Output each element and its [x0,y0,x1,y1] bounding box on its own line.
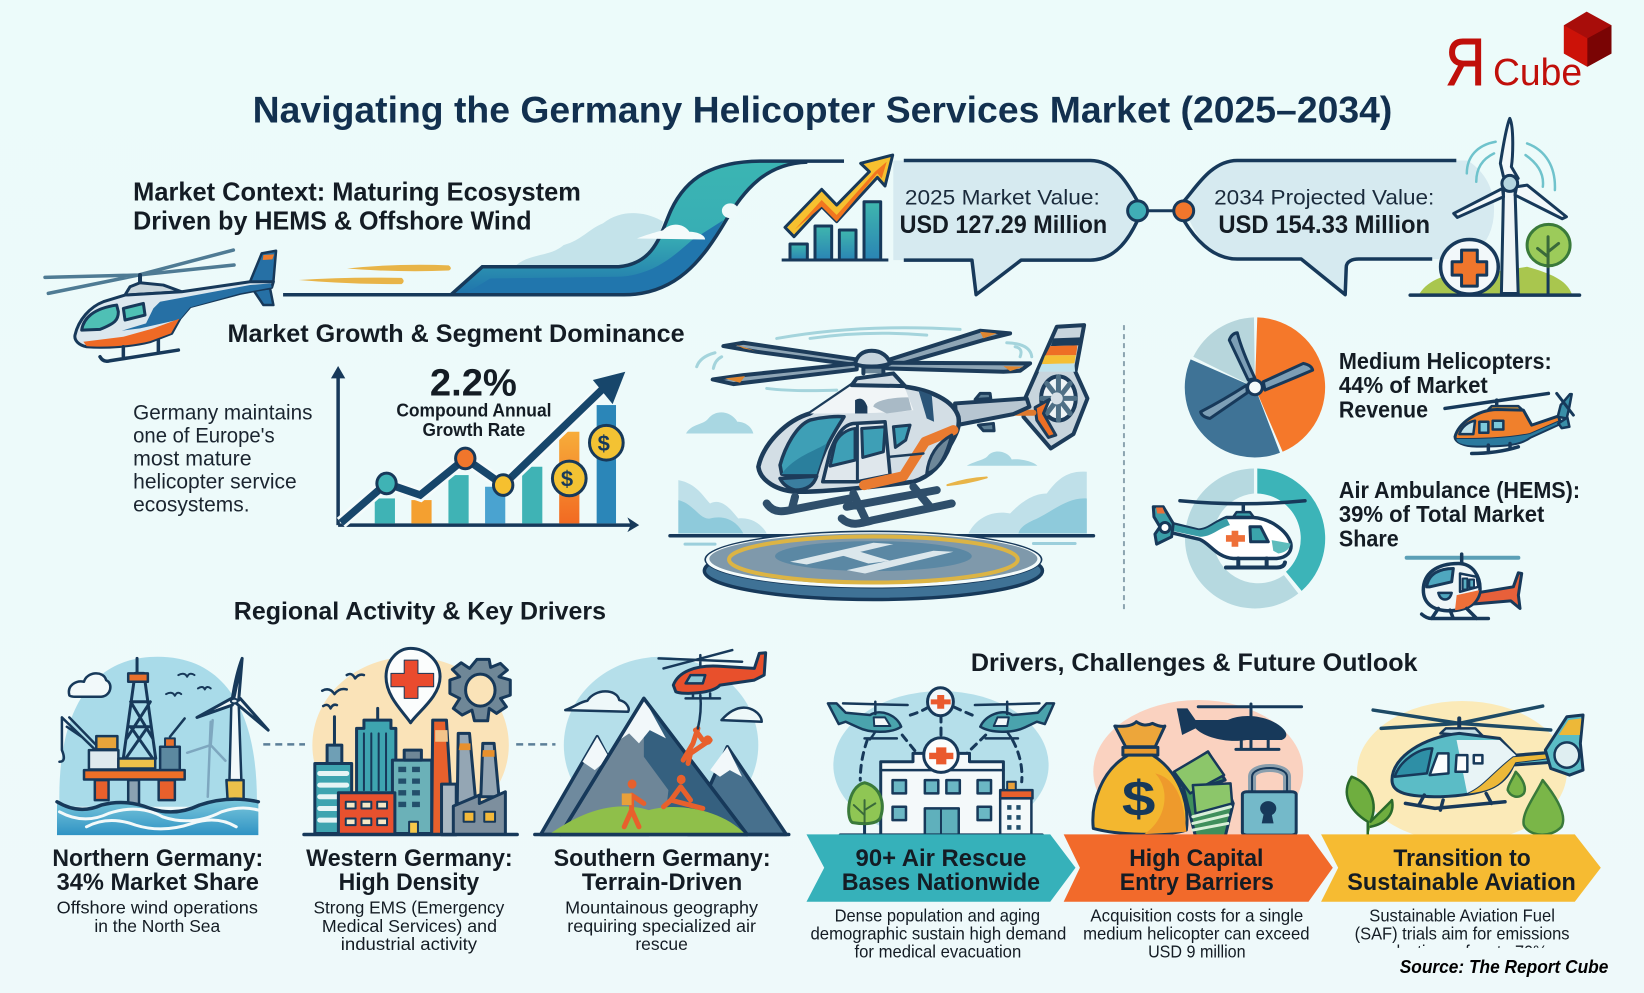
panel: southern germany: Terrain-Driven [582,869,742,896]
panel: sustainable aviation: Sustainable Aviation [1347,869,1576,896]
panel: sustainable aviation [1321,701,1601,961]
text: medium helicopters: Medium Helicopters: [1339,348,1552,374]
panel: capital barriers: USD 9 million [1148,941,1246,961]
callout: 2034 projected value: 2034 Projected Value: [1214,186,1434,210]
callout: 2034 projected value: USD 154.33 Million [1218,211,1430,239]
panel: capital barriers: Acquisition costs for a single [1090,906,1303,926]
heading: regional: Regional Activity & Key Drivers [234,598,606,626]
text: medium helicopters: 44% of Market [1339,372,1488,398]
title: Navigating the Germany Helicopter Services Market (2025–2034) [253,90,1392,131]
chart: CAGR growth: 2.2% [430,361,517,403]
panel: western germany: Medical Services) and [322,916,497,936]
panel: sustainable aviation: reductions of up to 70% [1377,941,1548,961]
text: medium helicopters [1339,348,1552,422]
callout: 2034 projected value [1184,160,1494,295]
panel: sustainable aviation: Transition to [1393,845,1531,872]
text: air ambulance: 39% of Total Market [1339,501,1545,527]
panel: northern germany: in the North Sea [94,916,220,936]
panel: northern germany: Northern Germany: [52,845,263,872]
panel: western germany: Strong EMS (Emergency [313,897,504,917]
panel: western germany: industrial activity [341,934,477,954]
panel: air rescue bases: demographic sustain high demand [810,923,1066,943]
icon: wind turbine and medical badge [1410,118,1580,295]
panel: southern germany: Southern Germany: [554,845,771,872]
text: air ambulance: Share [1339,525,1399,551]
icon: ambulance helicopter [1153,501,1305,567]
icon: speed lines [299,265,451,284]
text block: germany [133,401,312,517]
connector: value dots [1128,201,1194,221]
panel: capital barriers [1064,700,1333,961]
panel: capital barriers: medium helicopter can exceed [1083,923,1310,943]
chart: CAGR growth: $ [561,467,573,492]
pie chart: medium helicopters [1185,317,1325,457]
donut chart: air ambulance [1185,468,1325,608]
chart: CAGR growth: $ [598,431,610,456]
chevron: teal [806,834,1076,902]
panel: southern germany [535,650,789,954]
panel: air rescue bases: Dense population and aging [835,906,1040,926]
panel: sustainable aviation: Sustainable Aviation Fuel [1369,906,1555,926]
panel: southern germany: requiring specialized air [567,916,756,936]
panel: air rescue bases [806,688,1076,961]
callout: 2025 market value: USD 127.29 Million [900,211,1107,239]
text block: germany: ecosystems. [133,494,250,517]
icon: hospital network [828,688,1054,839]
panel: northern germany: Offshore wind operations [57,897,258,917]
icon: front-view helicopter [1407,554,1522,618]
connector [516,743,555,746]
chevron: yellow [1321,834,1601,902]
panel: southern germany: Mountainous geography [565,897,758,917]
source: Source: The Report Cube [1400,956,1608,977]
logo: RCube: Cube [1493,51,1582,93]
chart: CAGR growth [331,361,639,532]
ribbon: growth path [283,161,844,295]
text: air ambulance [1339,477,1580,551]
panel: southern germany: rescue [635,934,688,954]
text: medium helicopters: Revenue [1339,396,1428,422]
icon: orange helicopter [1445,393,1573,453]
panel: northern germany [52,657,268,936]
logo: RCube [1445,12,1611,100]
panel: northern germany: 34% Market Share [57,869,259,896]
text block: germany: most mature [133,448,252,471]
chart: CAGR growth: Compound Annual [396,399,551,420]
text block: germany: one of Europe's [133,425,275,448]
heading: market context [133,176,581,236]
panel: capital barriers: High Capital [1129,845,1263,872]
panel: air rescue bases: Bases Nationwide [842,869,1040,896]
heading: market context: Driven by HEMS & Offshore Wind [133,206,532,236]
panel: western germany [304,648,517,954]
text block: germany: helicopter service [133,471,297,494]
callout: 2025 market value: 2025 Market Value: [905,186,1100,210]
panel: capital barriers: Entry Barriers [1120,869,1274,896]
illustration: central helicopter over helipad [670,325,1093,599]
icon: rising bar chart with arrow [782,155,893,260]
connector [263,743,305,746]
text block: germany: Germany maintains [133,401,312,424]
panel: air rescue bases: 90+ Air Rescue [856,845,1026,872]
icon: mountain rescue [535,650,789,834]
icon: city and industry [304,648,517,835]
logo: RCube: Я [1445,25,1485,100]
panel: western germany: Western Germany: [306,845,513,872]
icon: SAF helicopter, leaf and drops [1347,701,1583,842]
icon: left helicopter [45,250,276,361]
panel: western germany: High Density [339,869,480,896]
callout: 2025 market value [893,160,1138,295]
panel: air rescue bases: for medical evacuation [855,941,1021,961]
heading: market growth: Market Growth & Segment Dominance [228,320,685,348]
icon: offshore rig and turbines [57,657,268,835]
divider [1123,325,1125,610]
heading: drivers: Drivers, Challenges & Future Outlook [971,649,1419,677]
icon: dollar sign: $ [1122,770,1155,827]
icon: money bag, cash and padlock [1093,700,1303,843]
heading: market context: Market Context: Maturing Ecosystem [133,176,581,206]
chevron: orange [1064,834,1333,902]
text: air ambulance: Air Ambulance (HEMS): [1339,477,1580,503]
panel: sustainable aviation: (SAF) trials aim for emissions [1355,923,1570,943]
chart: CAGR growth: Growth Rate [423,419,525,440]
